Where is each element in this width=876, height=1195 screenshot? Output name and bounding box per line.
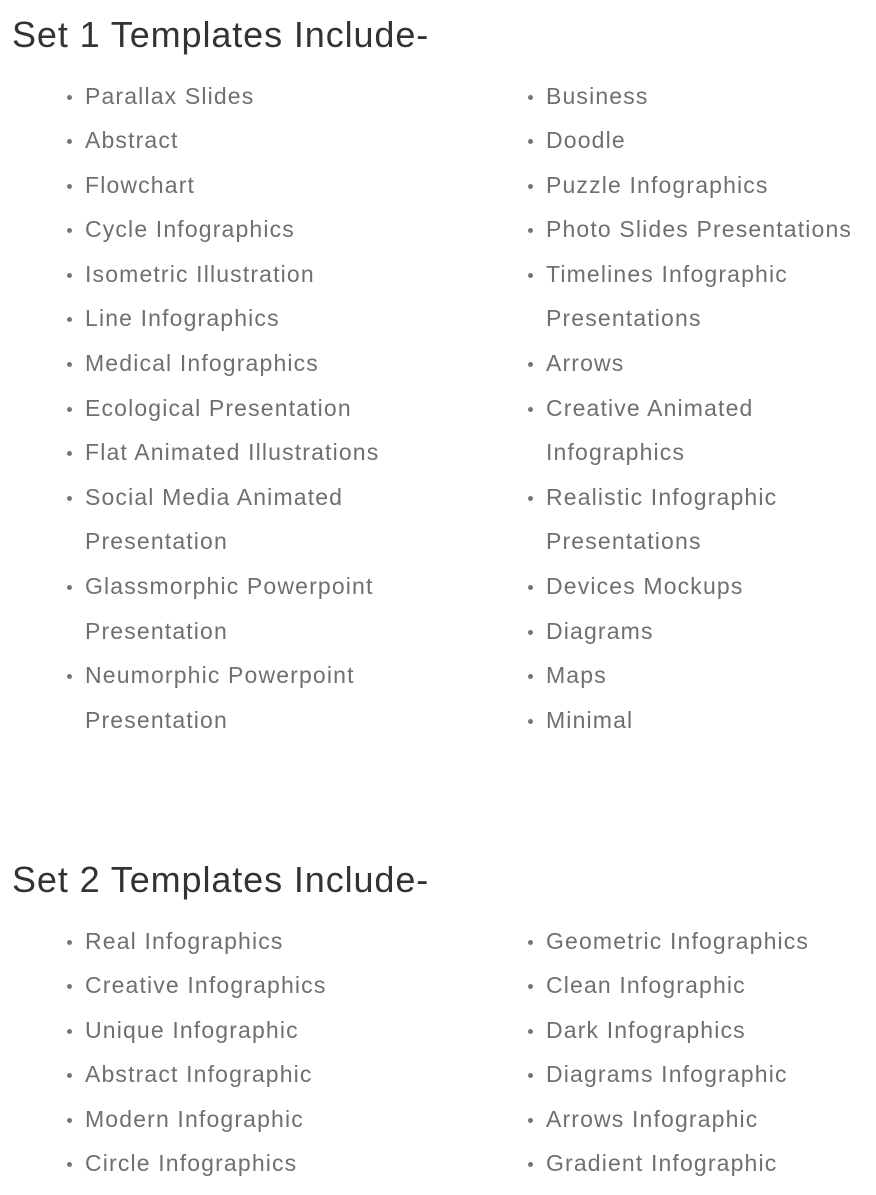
- list: set 2 left column: [67, 928, 326, 1176]
- list: set 1 right column: Infographics: [546, 439, 685, 465]
- list: set 2 right column: [528, 928, 809, 1176]
- list: set 1 left column: Line Infographics: [85, 305, 280, 331]
- list: set 1 right column: Minimal: [546, 707, 633, 733]
- list: set 1 left column: [67, 82, 379, 733]
- list: set 1 right column: Puzzle Infographics: [546, 172, 769, 198]
- list: set 2 right column: Dark Infographics: [546, 1017, 746, 1043]
- list: set 2 right column: Geometric Infographics: [546, 928, 809, 954]
- list: set 1 right column: Diagrams: [546, 618, 654, 644]
- list: set 1 right column: [528, 82, 852, 733]
- list: set 1 right column: Presentations: [546, 305, 702, 331]
- list: set 2 left column: Modern Infographic: [85, 1106, 304, 1132]
- list: set 1 left column: Glassmorphic Powerpoint: [85, 573, 374, 599]
- list: set 1 left column: Neumorphic Powerpoint: [85, 662, 355, 688]
- list: set 1 left column: Abstract: [85, 127, 179, 153]
- list: set 1 right column: Creative Animated: [546, 395, 753, 421]
- list: set 2 right column: Diagrams Infographic: [546, 1061, 788, 1087]
- list: set 1 right column: Presentations: [546, 528, 702, 554]
- list: set 1 right column: Devices Mockups: [546, 573, 743, 599]
- list: set 1 left column: Presentation: [85, 528, 228, 554]
- list: set 1 left column: Ecological Presentation: [85, 395, 352, 421]
- list: set 2 left column: Abstract Infographic: [85, 1061, 313, 1087]
- list: set 1 left column: Medical Infographics: [85, 350, 319, 376]
- list: set 2 right column: Arrows Infographic: [546, 1106, 758, 1132]
- list: set 1 right column: Doodle: [546, 127, 626, 153]
- list: set 1 left column: Flat Animated Illustrations: [85, 439, 379, 465]
- list: set 1 left column: Isometric Illustration: [85, 261, 315, 287]
- list: set 1 right column: Maps: [546, 662, 607, 688]
- list: set 2 left column: Circle Infographics: [85, 1150, 297, 1176]
- list: set 1 right column: Photo Slides Presentations: [546, 216, 852, 242]
- list: set 1 left column: Presentation: [85, 618, 228, 644]
- list: set 1 right column: Timelines Infographic: [546, 261, 788, 287]
- list: set 1 left column: Cycle Infographics: [85, 216, 295, 242]
- list: set 2 right column: Clean Infographic: [546, 972, 746, 998]
- list: set 1 left column: Presentation: [85, 707, 228, 733]
- title: set 2: Set 2 Templates Include-: [12, 859, 429, 900]
- list: set 1 left column: Flowchart: [85, 172, 195, 198]
- list: set 2 left column: Creative Infographics: [85, 972, 326, 998]
- list: set 1 right column: Arrows: [546, 350, 624, 376]
- list: set 1 left column: Social Media Animated: [85, 484, 343, 510]
- list: set 2 left column: Real Infographics: [85, 928, 284, 954]
- list: set 1 left column: Parallax Slides: [85, 82, 254, 108]
- title: set 1: Set 1 Templates Include-: [12, 14, 429, 55]
- list: set 1 right column: Realistic Infographic: [546, 484, 777, 510]
- list: set 2 right column: Gradient Infographic: [546, 1150, 777, 1176]
- list: set 2 left column: Unique Infographic: [85, 1017, 299, 1043]
- list: set 1 right column: Business: [546, 82, 649, 108]
